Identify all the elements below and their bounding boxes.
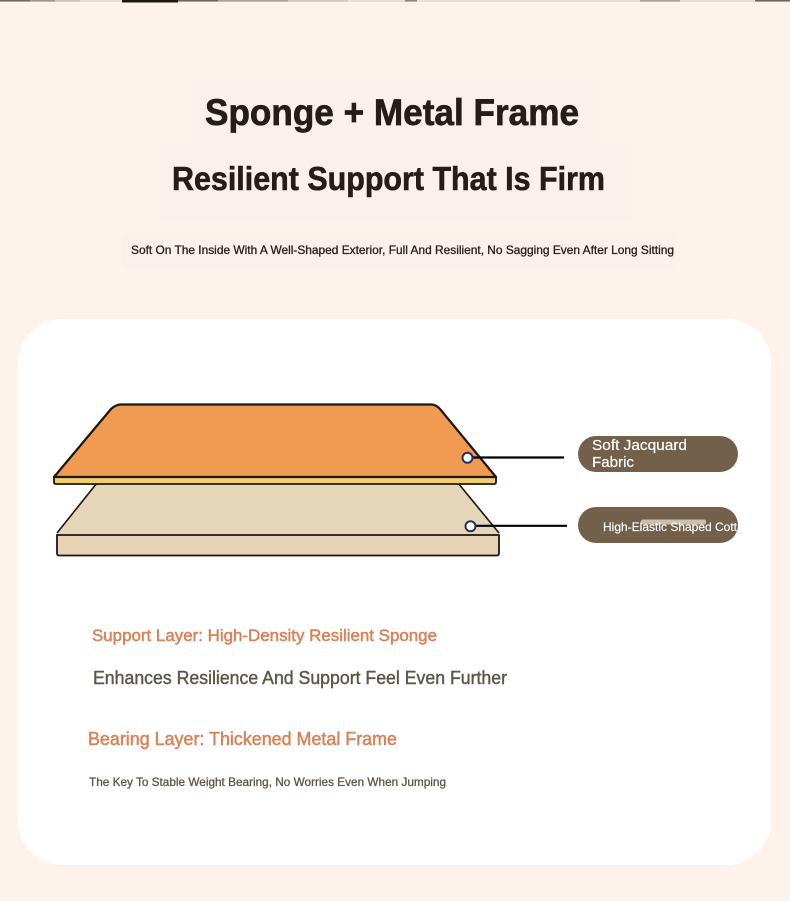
- label: soft jacquard fabric: Soft Jacquard: [592, 437, 687, 454]
- upper layer top face: [54, 404, 496, 477]
- title: line two: Resilient Support That Is Firm: [172, 160, 605, 197]
- illustration: lower layer, high-elastic cotton: [57, 480, 499, 556]
- heading: bearing layer: Bearing Layer: Thickened Metal Frame: [88, 729, 397, 749]
- label: high-elastic shaped cotton: High-Elastic Shaped Cott: [603, 520, 738, 534]
- title: line one: Sponge + Metal Frame: [205, 92, 579, 133]
- label: high-elastic shaped cotton: [578, 507, 738, 543]
- lower layer front edge: [57, 535, 499, 556]
- illustration: upper layer, jacquard fabric: [54, 404, 496, 484]
- text: bearing layer description: The Key To Stable Weight Bearing, No Worries Even When Jumping: [89, 775, 446, 789]
- label: soft jacquard fabric: [578, 436, 738, 472]
- top photo strip: [0, 0, 790, 2]
- text: support layer description: Enhances Resilience And Support Feel Even Further: [93, 668, 507, 688]
- subtitle: Soft On The Inside With A Well-Shaped Exterior, Full And Resilient, No Sagging Even After Long Sitting: [131, 243, 674, 257]
- label: soft jacquard fabric: Fabric: [592, 454, 634, 471]
- panel: white card: [18, 319, 771, 865]
- lower layer top face: [57, 480, 499, 535]
- upper layer front edge: [54, 477, 496, 484]
- callout line: fabric: [462, 453, 564, 463]
- heading: support layer: Support Layer: High-Density Resilient Sponge: [92, 626, 437, 645]
- callout line: cotton: [466, 521, 567, 531]
- title backing panel: [123, 78, 675, 267]
